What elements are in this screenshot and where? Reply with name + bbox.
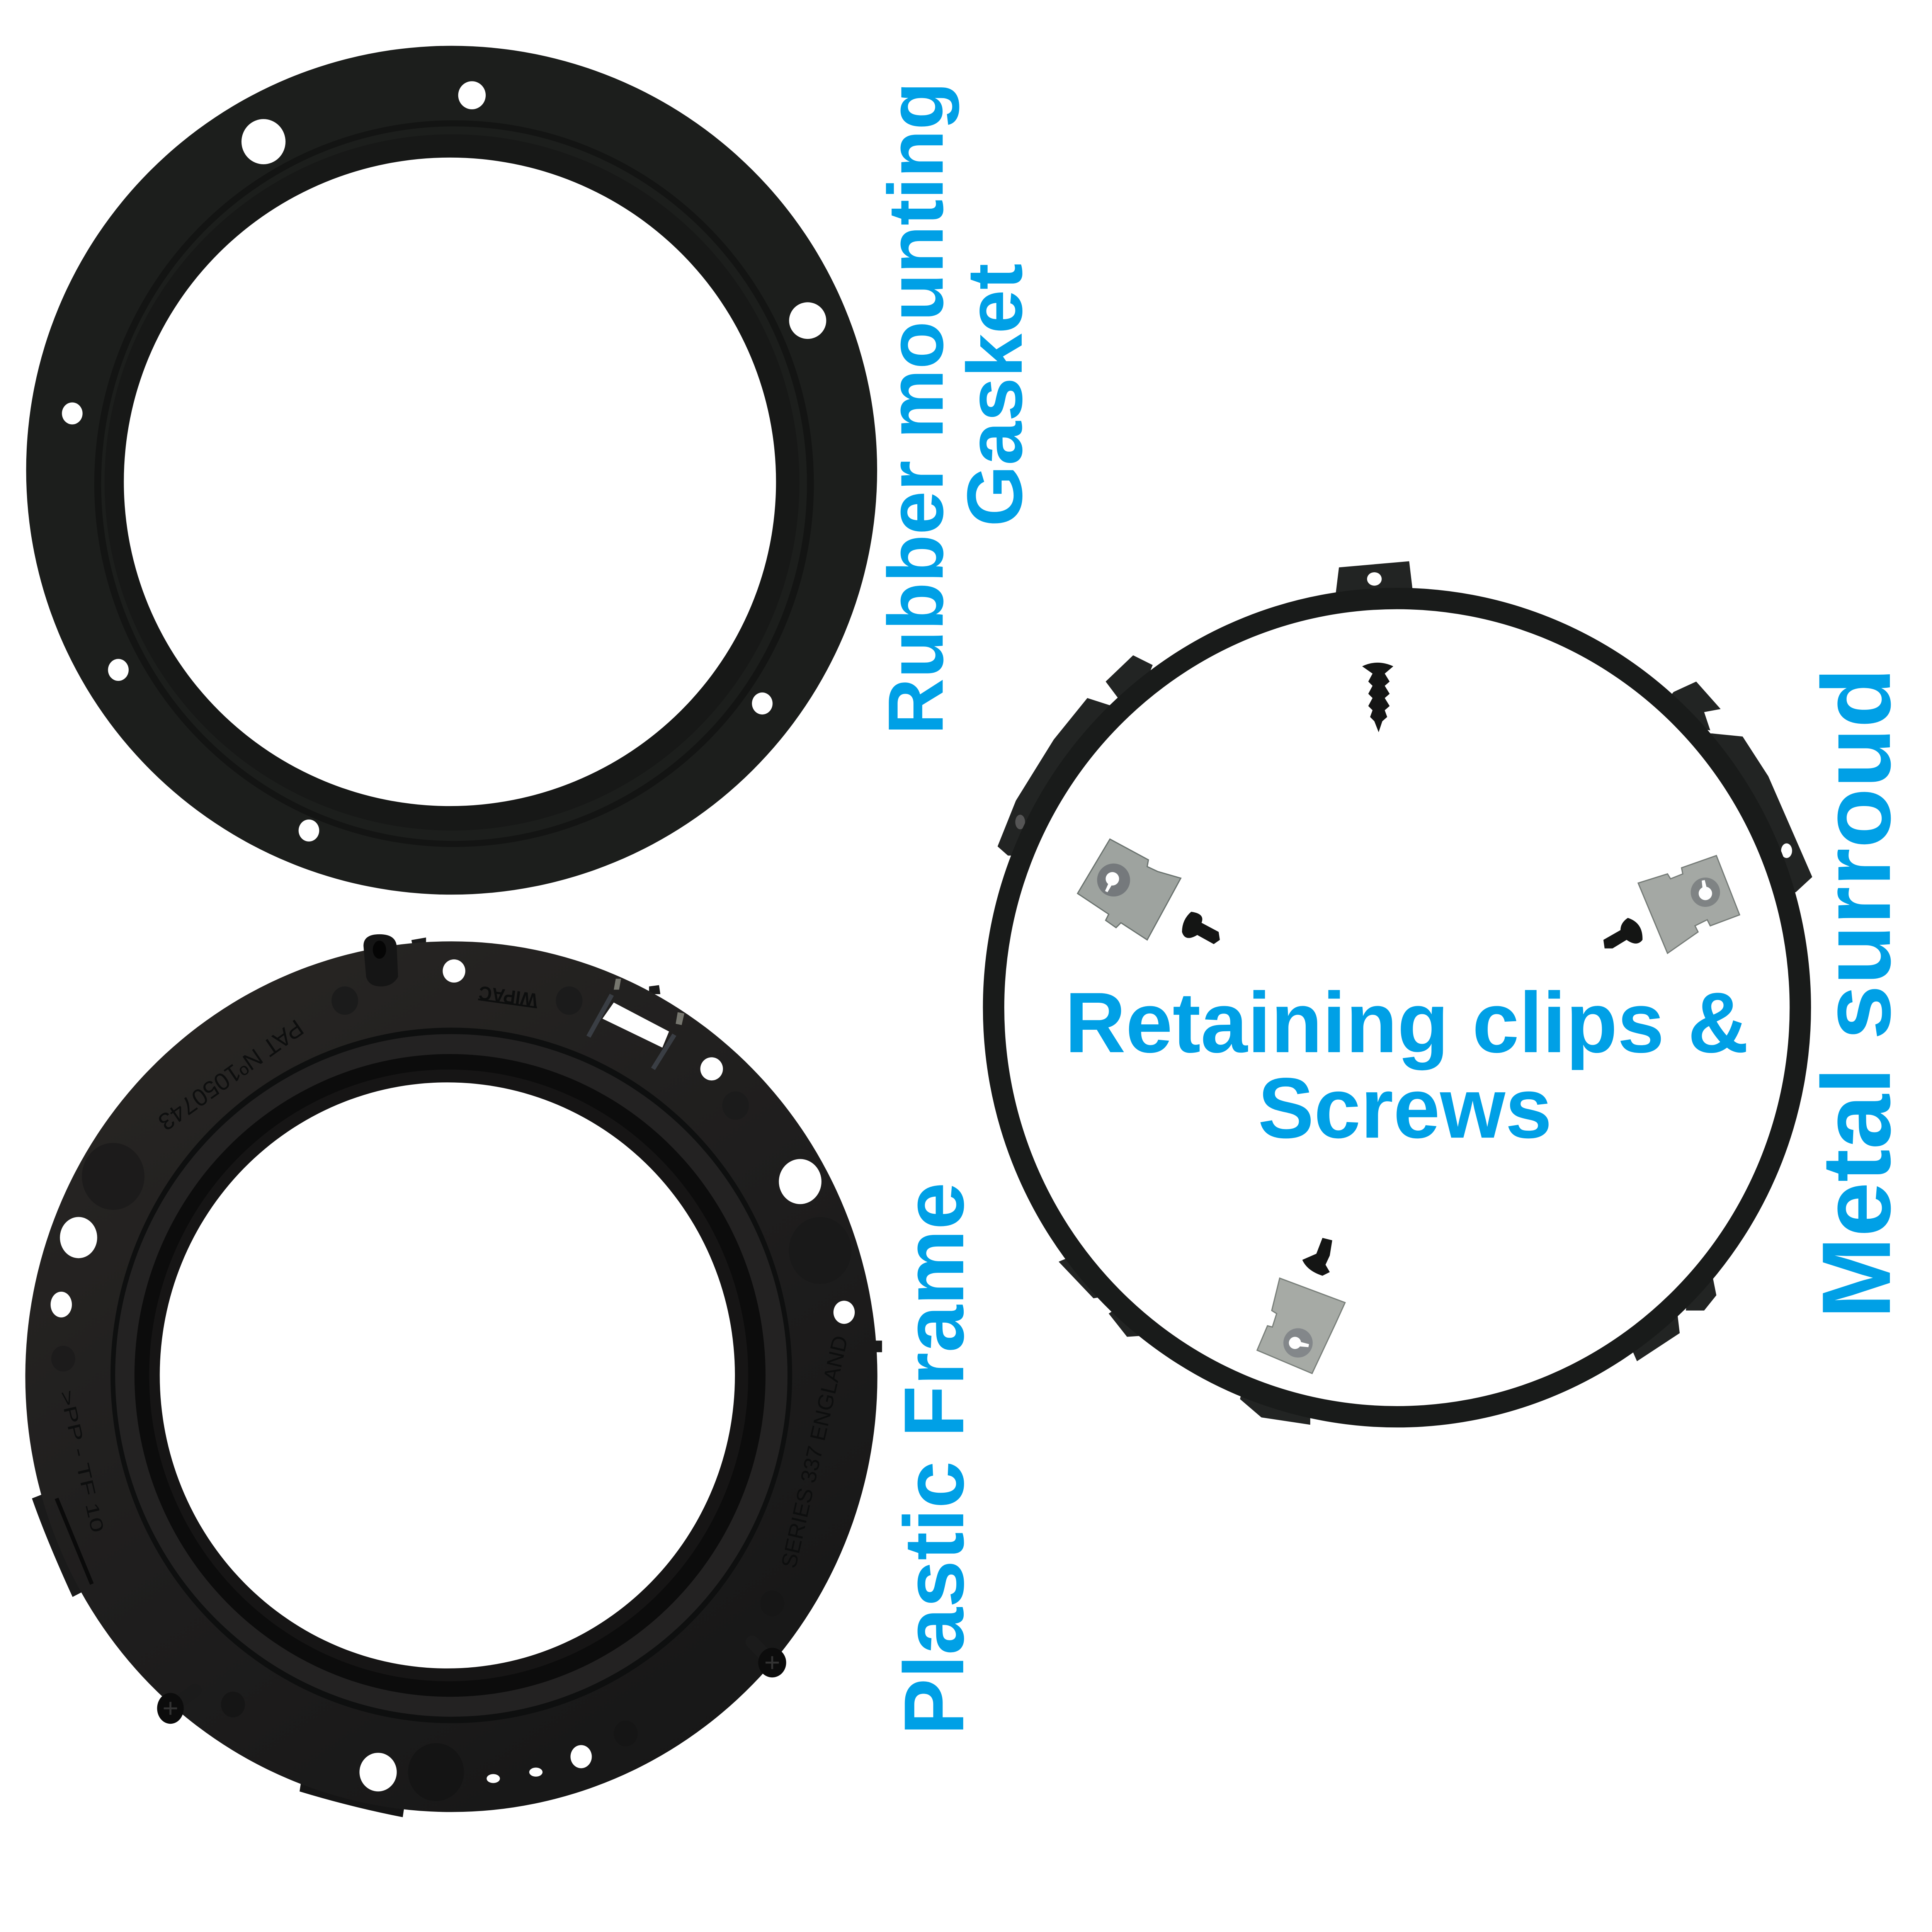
faint moulded discs [82,1143,145,1210]
embossed lettering on frame: WIPAC [478,982,539,1012]
screw: bottom short [1302,1238,1332,1276]
heading: plastic frame: Plastic Frame [887,1182,981,1735]
centre opening [160,1082,735,1668]
screw: left short [1182,912,1220,944]
heading: rubber mounting gasket [872,82,1039,735]
label: retaining clips and screws: Retaining clips & [1065,975,1748,1070]
screw: right short [1604,918,1643,948]
metal ring [993,599,1800,1417]
label: retaining clips and screws: Screws [1258,1060,1552,1156]
top peg [364,934,398,986]
panel: metal surround ring with retaining clips and screws [993,561,1812,1425]
panel: plastic frame ring [25,934,882,1817]
embossed lettering on frame: >PP - TF 10 [56,1388,107,1534]
panel: rubber mounting gasket ring [26,46,877,895]
raised inner ridges [111,1028,792,1723]
heading: rubber mounting gasket: Gasket [951,264,1039,527]
embossed lettering on frame: SERIES 337 ENGLAND [776,1333,852,1570]
surround tabs [998,561,1812,1425]
holes [443,959,465,983]
embossed lettering on frame: PAT Nº1050743 [153,1014,308,1136]
retaining clip: right [1638,855,1740,953]
retaining clip: bottom [1257,1278,1345,1373]
fixing screws [752,1642,772,1663]
heading: rubber mounting gasket: Rubber mounting [872,82,959,735]
label: retaining clips and screws [1065,975,1748,1156]
side tabs and nubs [32,1489,94,1597]
screw: long wood screw [1362,663,1393,732]
embossed lettering on frame [56,982,852,1570]
retaining clip: left [1078,839,1181,940]
slot bracket [588,995,674,1069]
heading: metal surround: Metal surroud [1802,668,1911,1319]
